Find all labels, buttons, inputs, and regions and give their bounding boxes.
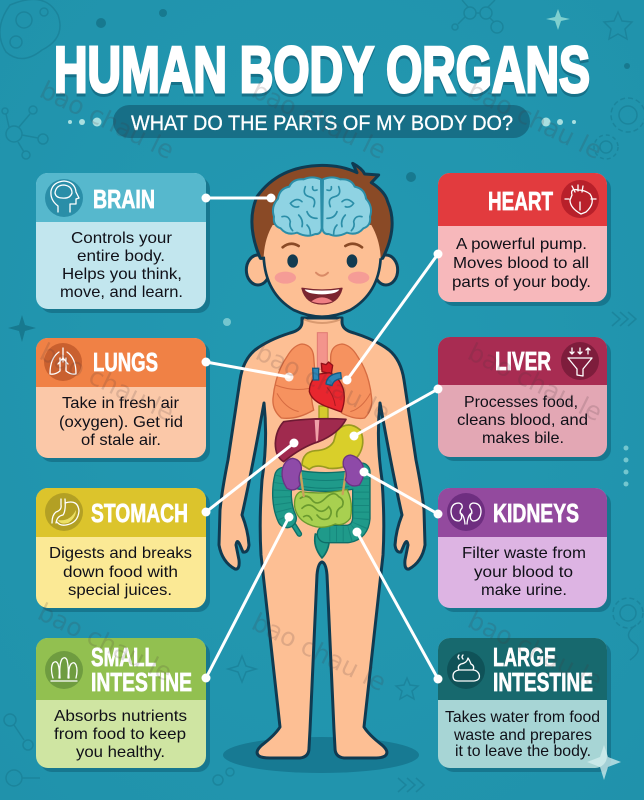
description: entire body.: [77, 248, 165, 265]
description: it to leave the body.: [455, 743, 591, 760]
heading: HEART: [488, 186, 553, 216]
ureters: [300, 472, 346, 496]
description: (oxygen). Get rid: [59, 414, 183, 431]
icon: lungs: [44, 343, 82, 381]
description: Digests and breaks: [49, 545, 192, 562]
ears: [246, 255, 270, 285]
description: down food with: [63, 564, 178, 581]
description: waste and prepares: [453, 727, 592, 744]
panel: heart: [438, 173, 611, 306]
large intestine: [282, 472, 361, 558]
panel: liver: [438, 337, 611, 461]
trachea: [317, 333, 327, 369]
body illustration: [219, 163, 425, 773]
panel: large intestine: [438, 638, 611, 772]
description: Take in fresh air: [62, 395, 180, 412]
description: [54, 708, 187, 761]
heading: SMALL: [91, 642, 156, 672]
description: Controls your: [71, 230, 173, 247]
hair: [252, 163, 392, 258]
description: parts of your body.: [452, 274, 591, 291]
small intestine: [295, 489, 351, 527]
kidneys: [282, 458, 301, 490]
description: you healthy.: [76, 744, 165, 761]
subtitle pill: WHAT DO THE PARTS OF MY BODY DO?: [131, 112, 513, 135]
description: [462, 545, 586, 599]
watermark: bao chau le: [463, 605, 607, 695]
watermark: bao chau le: [35, 337, 179, 427]
cheeks: [275, 272, 296, 284]
heading: INTESTINE: [493, 667, 593, 697]
heading: [493, 642, 593, 697]
nose: [316, 273, 328, 276]
eyes: [287, 254, 298, 268]
panel: stomach: [36, 488, 210, 612]
icon: stomach: [45, 493, 83, 531]
heading: KIDNEYS: [493, 498, 579, 528]
description: Filter waste from: [462, 545, 586, 562]
icon: heart: [561, 180, 599, 218]
watermark: bao chau le: [35, 75, 179, 165]
panel: kidneys: [438, 488, 611, 612]
heading: BRAIN: [93, 184, 155, 214]
description: make urine.: [481, 582, 567, 599]
heading: LUNGS: [93, 347, 158, 377]
mouth: [302, 288, 342, 304]
description: Takes water from food: [445, 709, 600, 726]
icon: funnel: [561, 342, 599, 380]
watermark: bao chau le: [463, 337, 607, 427]
heading: LARGE: [493, 642, 556, 672]
esophagus: [319, 406, 328, 420]
organs: [273, 333, 372, 558]
icon: kidneys: [447, 493, 485, 531]
sparkle: [587, 745, 621, 780]
panel: brain: [36, 173, 210, 313]
watermark: bao chau le: [33, 597, 177, 687]
floor shadow: [223, 737, 419, 773]
panel: lungs: [36, 338, 210, 462]
description: A powerful pump.: [456, 236, 587, 253]
description: [59, 395, 183, 449]
brows: [283, 244, 299, 247]
description: [60, 230, 183, 301]
icon: stool: [447, 651, 485, 689]
liver: [275, 419, 346, 462]
description: move, and learn.: [60, 284, 183, 301]
description: Moves blood to all: [453, 255, 589, 272]
lungs: [273, 344, 315, 418]
description: [49, 545, 192, 599]
description: makes bile.: [482, 430, 564, 447]
description: from food to keep: [54, 726, 186, 743]
watermark: bao chau le: [247, 607, 391, 697]
connector lines: [202, 194, 442, 684]
icon: brain: [45, 179, 83, 217]
description: Absorbs nutrients: [54, 708, 187, 725]
subtitle pill: [68, 105, 576, 138]
icon: villi: [45, 651, 83, 689]
heading: [91, 642, 192, 697]
watermark: bao chau le: [247, 75, 391, 165]
description: [457, 394, 588, 447]
description: cleans blood, and: [457, 412, 588, 429]
watermark: [33, 75, 607, 697]
heading: INTESTINE: [91, 667, 192, 697]
panel: small intestine: [36, 638, 210, 772]
description: [452, 236, 591, 291]
description: of stale air.: [81, 432, 161, 449]
brain: [273, 177, 371, 236]
description: your blood to: [474, 564, 573, 581]
heading: LIVER: [495, 346, 551, 376]
description: Processes food,: [464, 394, 578, 411]
watermark: bao chau le: [251, 337, 395, 427]
face: [264, 225, 381, 317]
description: [445, 709, 600, 760]
watermark: bao chau le: [463, 75, 607, 165]
stomach: [302, 425, 363, 469]
heading: STOMACH: [91, 498, 188, 528]
head: [246, 163, 398, 323]
body silhouette: [219, 318, 425, 758]
heart: [309, 362, 344, 412]
description: Helps you think,: [62, 266, 182, 283]
description: special juices.: [68, 582, 172, 599]
